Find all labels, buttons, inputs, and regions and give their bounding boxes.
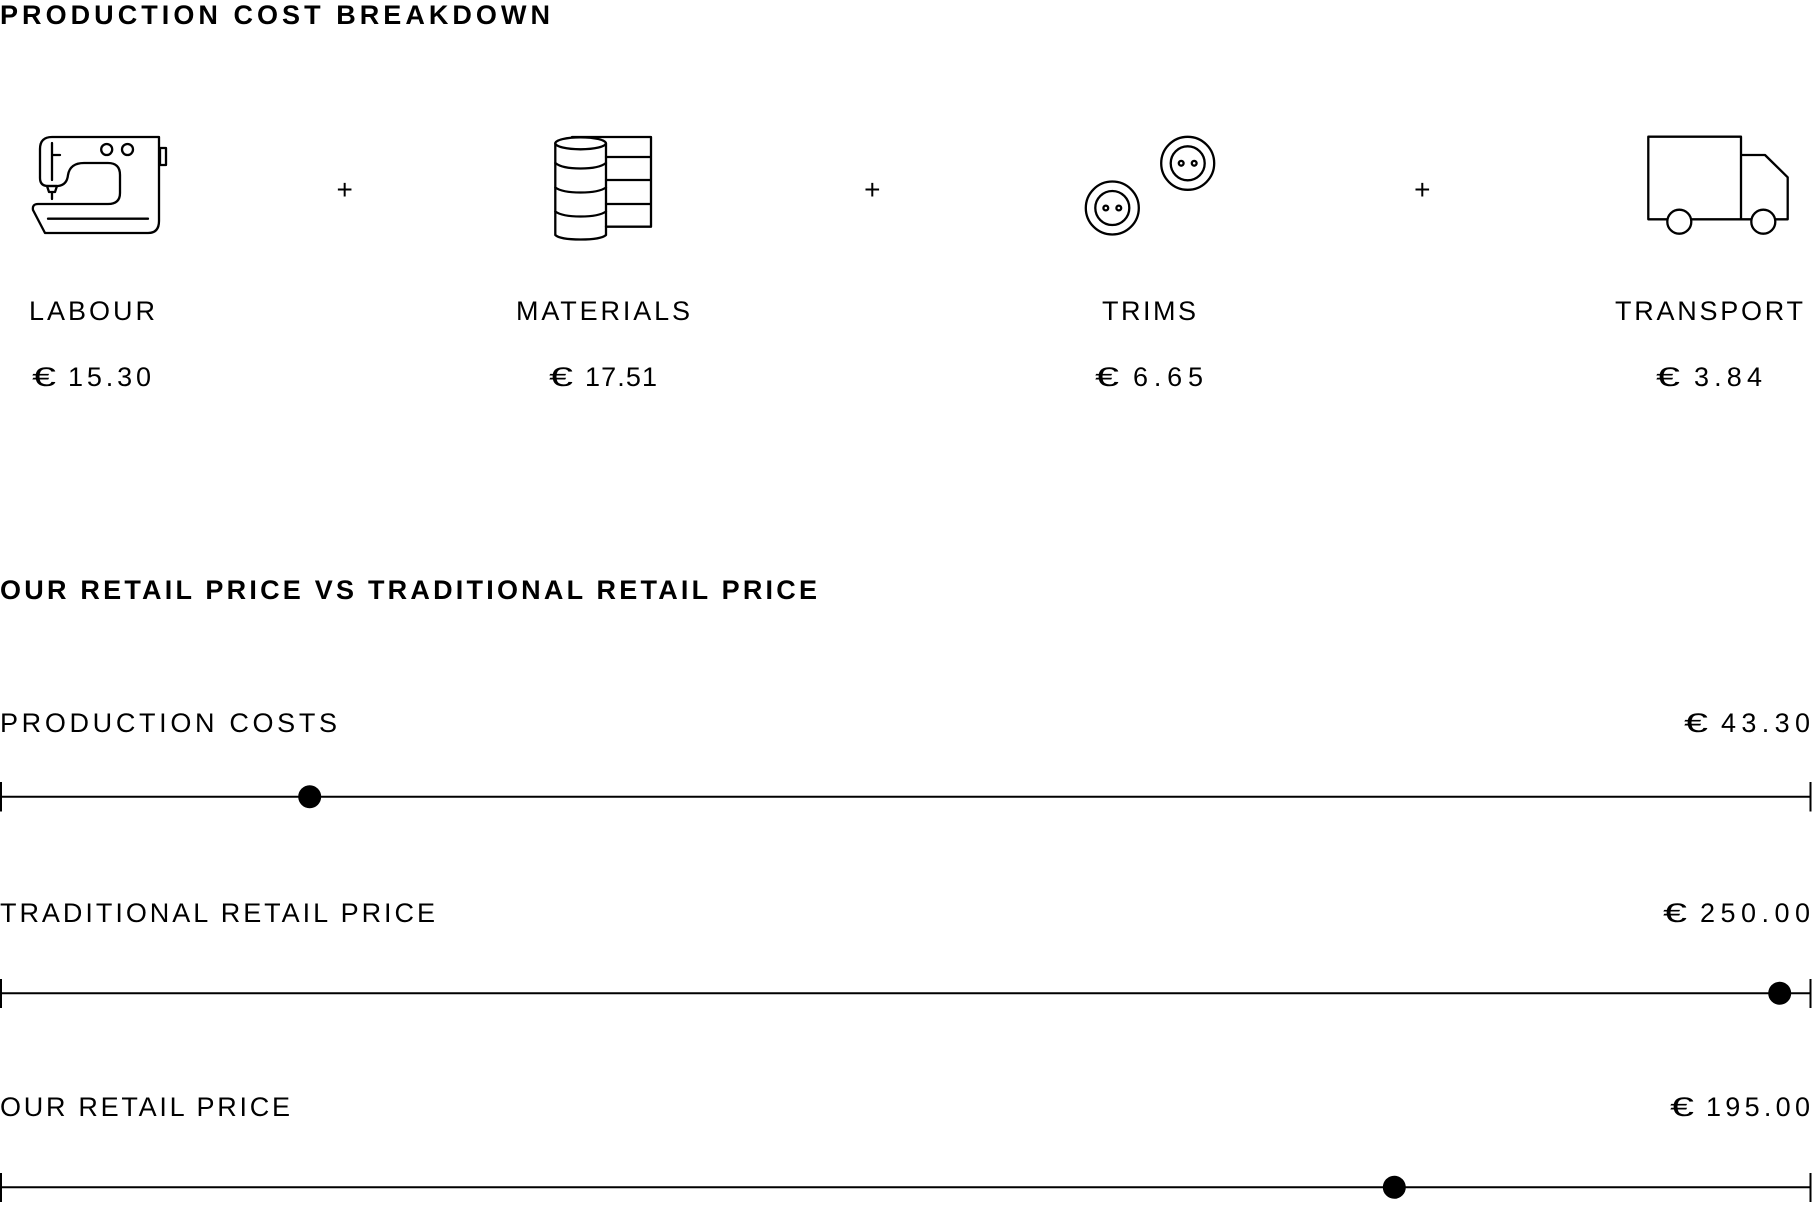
heading: production cost breakdown: PRODUCTION COST BREAKDOWN [0, 0, 550, 30]
panel: trims [1086, 137, 1214, 392]
label: materials: MATERIALS [516, 296, 690, 326]
value: labour cost: 15.30 [68, 362, 151, 392]
label: production costs: PRODUCTION COSTS [0, 708, 337, 738]
label: traditional retail price: TRADITIONAL RETAIL PRICE [0, 898, 435, 928]
value: our retail price: € [1670, 1092, 1694, 1122]
label: labour: LABOUR [29, 296, 155, 326]
label: trims: TRIMS [1102, 296, 1196, 326]
value: transport cost: 3.84 [1694, 362, 1762, 392]
value: materials cost [549, 362, 657, 392]
scale bar [1, 782, 1811, 812]
panel: labour [29, 137, 166, 392]
value: transport cost: € [1656, 362, 1680, 392]
icon: buttons [1086, 137, 1214, 234]
heading: our retail price vs traditional retail price: OUR RETAIL PRICE VS TRADITIONAL RETAIL PRICE [0, 575, 817, 605]
value: our retail price: 195.00 [1706, 1092, 1810, 1122]
label: transport: TRANSPORT [1615, 296, 1803, 326]
panel: transport [1615, 137, 1803, 392]
value: materials cost: 17.51 [585, 362, 657, 392]
label: our retail price: OUR RETAIL PRICE [0, 1092, 290, 1122]
value: labour cost [32, 362, 151, 392]
row: traditional retail price [0, 898, 1811, 1008]
plus sign: + [1414, 174, 1430, 205]
value: transport cost [1656, 362, 1762, 392]
value: traditional retail price: € [1663, 898, 1687, 928]
value: trims cost [1095, 362, 1203, 392]
scale bar [1, 1173, 1811, 1202]
value: production costs: € [1684, 708, 1708, 738]
icon: fabric rolls [555, 137, 651, 240]
value: production costs: 43.30 [1721, 708, 1810, 738]
scale bar [1, 979, 1811, 1008]
plus sign: + [337, 174, 353, 205]
value: trims cost: € [1095, 362, 1119, 392]
value: materials cost: € [549, 362, 573, 392]
value: labour cost: € [32, 362, 56, 392]
icon: truck [1648, 137, 1788, 234]
value: trims cost: 6.65 [1133, 362, 1203, 392]
row: our retail price [0, 1092, 1811, 1202]
plus sign: + [864, 174, 880, 205]
icon: sewing machine [33, 137, 166, 233]
panel: materials [516, 137, 690, 392]
value: traditional retail price: 250.00 [1700, 898, 1810, 928]
row: production costs [0, 708, 1811, 812]
